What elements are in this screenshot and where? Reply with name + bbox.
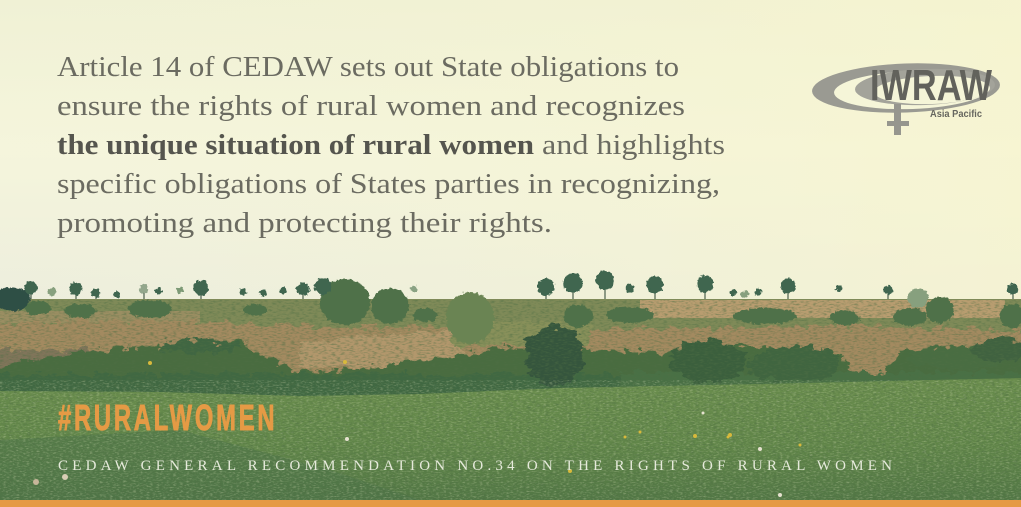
logo swoosh	[811, 60, 1001, 116]
wildflowers	[33, 360, 802, 497]
dark hedge	[0, 340, 1021, 400]
logo female symbol	[887, 104, 909, 135]
bottom orange bar	[0, 500, 1021, 507]
line 4: specific obligations of States parties in recognizing,	[57, 168, 720, 200]
line 3	[57, 129, 725, 161]
sky	[0, 0, 1021, 300]
line 1: Article 14 of CEDAW sets out State obligations to	[57, 51, 679, 83]
tree trunks	[31, 282, 1013, 299]
rest of line 3: and highlights	[542, 129, 725, 161]
shrubs and tree line	[0, 271, 1021, 344]
grass texture	[0, 300, 1021, 500]
main paragraph	[57, 51, 725, 239]
tan meadow	[0, 320, 1021, 380]
subtitle: CEDAW GENERAL RECOMMENDATION NO.34 ON THE RIGHTS OF RURAL WOMEN	[58, 458, 892, 474]
trees	[25, 271, 1018, 308]
far field	[0, 299, 1021, 399]
lawn shadow	[0, 430, 420, 500]
shrubs	[0, 279, 1021, 344]
bold phrase: the unique situation of rural women	[57, 129, 534, 161]
meadow and hedges	[0, 320, 1021, 400]
hashtag: #RURALWOMEN	[58, 398, 274, 438]
logo subtitle: Asia Pacific	[930, 108, 982, 120]
lawn	[0, 378, 1021, 500]
logo: IWRAW Asia Pacific	[811, 60, 1001, 135]
line 5: promoting and protecting their rights.	[57, 207, 552, 239]
line 2: ensure the rights of rural women and recognizes	[57, 90, 685, 122]
